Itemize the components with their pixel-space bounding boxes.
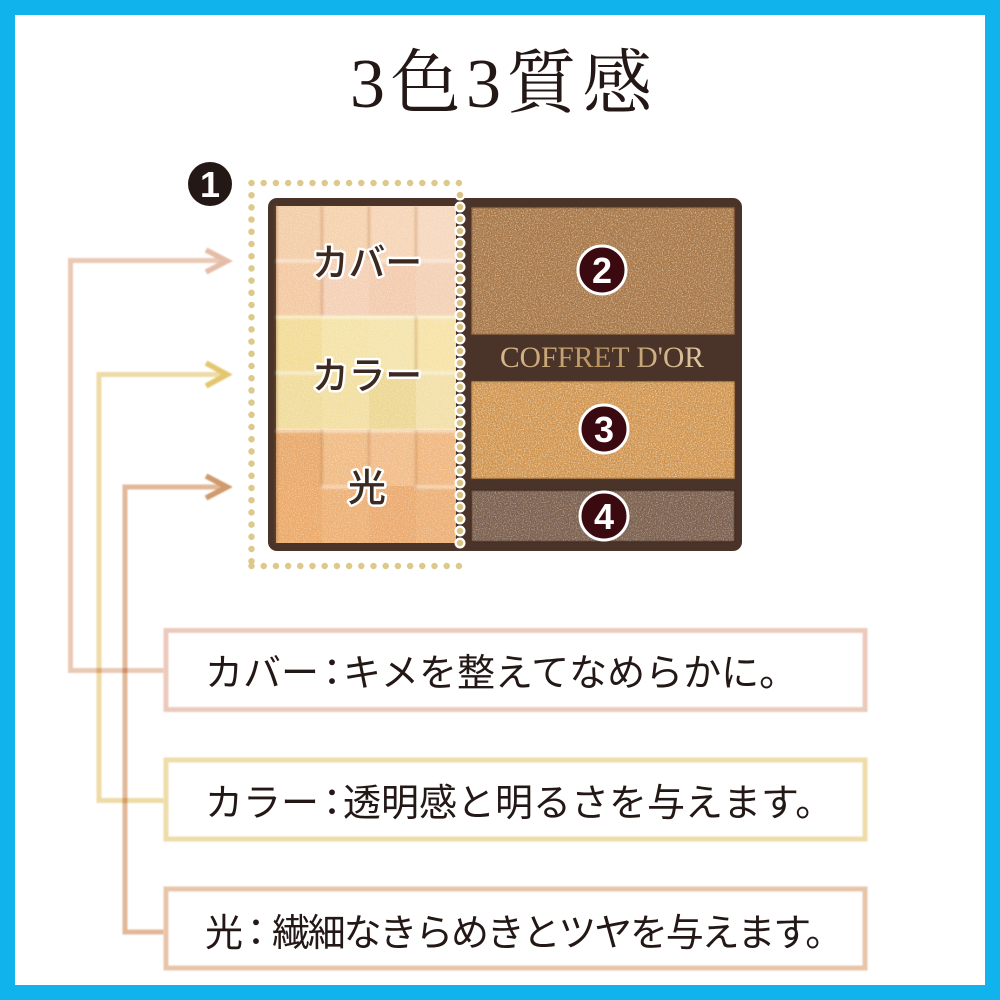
description box: light: 繊細なきらめきとツヤを与えます。 — [272, 913, 841, 955]
cover tiles — [276, 206, 456, 316]
pan 3 — [471, 381, 735, 479]
tile label: color: カラー — [312, 356, 422, 398]
description box: cover: カバー — [205, 653, 319, 695]
description box: color: 透明感と明るさを与えます。 — [343, 783, 833, 825]
pan 2 — [471, 207, 735, 335]
number badge 1: 1 — [200, 164, 220, 205]
connector: cover line and arrow — [70, 250, 227, 670]
pan 4 — [471, 490, 735, 542]
number badge 4 — [580, 492, 628, 540]
description box: color — [166, 760, 865, 839]
description box: light: ： — [237, 913, 275, 955]
number badge 2 — [578, 246, 626, 294]
description box: cover: ： — [313, 653, 351, 695]
description box: light — [166, 889, 865, 968]
number badge 4: 4 — [594, 496, 614, 537]
connector: light line and arrow — [125, 476, 227, 932]
color tiles — [276, 316, 456, 430]
description box: light: 光 — [205, 913, 243, 955]
number badge 2: 2 — [592, 250, 612, 291]
number badge 3 — [580, 405, 628, 453]
panel 1: tiled powder — [276, 205, 456, 543]
light tiles — [276, 430, 456, 543]
tile label: light: 光 — [348, 468, 386, 510]
number badge 1 — [188, 162, 232, 206]
palette case — [268, 198, 742, 551]
dotted highlight around panel 1 — [252, 183, 462, 566]
description box: color: カラー — [205, 783, 319, 825]
description box: cover: キメを整えてなめらかに。 — [343, 653, 797, 695]
connector: color line and arrow — [99, 363, 227, 800]
number badge 3: 3 — [594, 409, 614, 450]
title: 3色3質感 — [350, 46, 654, 123]
brand name: COFFRET D'OR — [500, 341, 704, 374]
tile label: cover: カバー — [312, 243, 422, 285]
description box: color: ： — [313, 783, 351, 825]
description box: cover — [166, 630, 865, 710]
